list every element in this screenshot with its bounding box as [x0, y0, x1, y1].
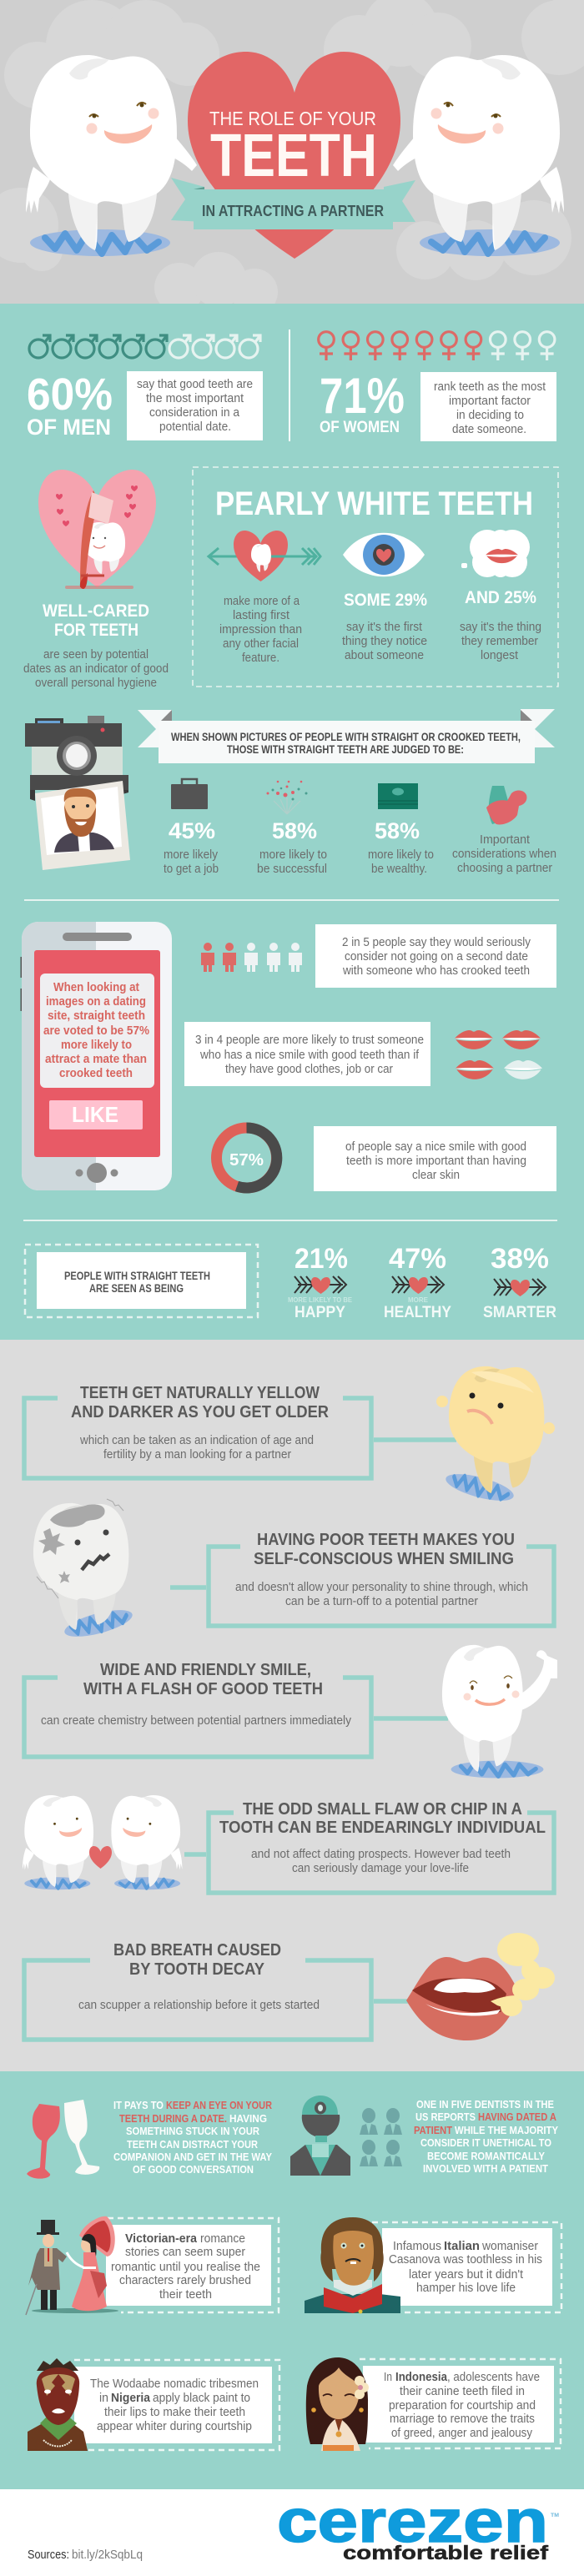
text [251, 1848, 511, 1875]
text: later years but it didn't [409, 2268, 523, 2282]
sources [28, 2548, 143, 2562]
text: OF GOOD CONVERSATION [133, 2163, 254, 2176]
text: of greed, anger and jealousy [391, 2427, 533, 2440]
icon: banknotes [378, 783, 418, 809]
text: can create chemistry between potential partners immediately [41, 1714, 352, 1728]
stat: 57% clear skin: of people say a nice smile with good [345, 1140, 526, 1154]
title: IN ATTRACTING A PARTNER [202, 203, 384, 219]
stat: 45% get a job: more likely [164, 848, 219, 862]
heading: HAVING POOR TEETH MAKES YOU [257, 1531, 515, 1549]
banner: straight teeth judged: WHEN SHOWN PICTURES OF PEOPLE WITH STRAIGHT OR CROOKED TEETH, [171, 731, 521, 743]
stat: 3 in 4 people: they have good clothes, job or car [225, 1063, 393, 1076]
text [414, 2098, 558, 2175]
text box: women: rank teeth as the most [434, 380, 546, 394]
stat: 58% wealthy [368, 783, 434, 876]
text box: women [420, 372, 556, 441]
text: fertility by a man looking for a partner [103, 1448, 291, 1462]
text: in [99, 2392, 108, 2405]
heading [71, 1384, 330, 1421]
heading: pearly white teeth: PEARLY WHITE TEETH [215, 486, 533, 522]
background: header [0, 0, 584, 304]
sources: Sources: [28, 2548, 69, 2562]
phone screen card text: site, straight teeth [48, 1009, 145, 1023]
text: IT PAYS TO [113, 2099, 164, 2111]
stat: 47% healthy [384, 1243, 451, 1321]
icon row: people [201, 943, 302, 972]
stat: considerations: Important [480, 833, 530, 847]
icon: briefcase [171, 779, 208, 809]
text box: women: date someone. [452, 423, 526, 436]
text: womaniser [481, 2240, 538, 2253]
heading: SELF-CONSCIOUS WHEN SMILING [254, 1550, 514, 1568]
text: SOMETHING STUCK IN YOUR [126, 2125, 260, 2137]
banner: straight teeth judged [138, 709, 555, 763]
text: and doesn't allow your personality to shine through, which [235, 1581, 528, 1594]
card: Indonesia [306, 2357, 561, 2451]
stat: and 25%: longest [481, 649, 518, 662]
icon: eye [343, 533, 425, 576]
text [384, 2371, 540, 2440]
text: BECOME ROMANTICALLY [427, 2150, 545, 2162]
panel: men statistic [27, 335, 263, 440]
card: Wodaabe [28, 2358, 279, 2451]
text: COMPANION AND GET IN THE WAY [113, 2151, 272, 2163]
heading: AND DARKER AS YOU GET OLDER [71, 1403, 330, 1421]
panel: yellow teeth [24, 1366, 555, 1506]
illustration: yellow sad tooth [436, 1366, 555, 1506]
text: their canine teeth filed in [400, 2385, 525, 2398]
card: Casanova [305, 2217, 561, 2314]
icon: heart arrow [392, 1276, 444, 1294]
phone screen card text: crooked teeth [59, 1067, 133, 1080]
text: apply black paint to [153, 2392, 250, 2405]
text [389, 2240, 542, 2295]
stat: 38% smarter: 38% [491, 1243, 549, 1275]
text: Nigeria [111, 2392, 151, 2405]
text: stories can seem super [125, 2246, 245, 2259]
text [235, 1581, 528, 1608]
panel: bad breath [24, 1933, 555, 2040]
text: can be a turn-off to a potential partner [285, 1595, 478, 1608]
stat: considerations [452, 786, 556, 875]
phone screen card text: When looking at [53, 981, 139, 994]
text: characters rarely brushed [119, 2274, 251, 2287]
text: first impression: make more of a [224, 595, 300, 608]
stat: 47% healthy: 47% [389, 1243, 446, 1275]
text [111, 2232, 260, 2302]
stat: 47% healthy: MORE [408, 1296, 428, 1304]
text: Italian [444, 2240, 480, 2253]
text: their lips to make their teeth [104, 2406, 245, 2419]
stat: some 29%: say it's the first [346, 621, 422, 634]
stat: 21% happy: MORE LIKELY TO BE [288, 1296, 352, 1304]
icon row: female symbols [319, 332, 555, 360]
text: HAVING DATED A [478, 2111, 557, 2123]
text box: men: the most important [146, 392, 244, 405]
donut chart: 57% [217, 1128, 277, 1188]
text box: men: potential date. [159, 420, 231, 434]
icon group: four lips [455, 1030, 542, 1079]
heading [254, 1531, 515, 1568]
heading: TEETH GET NATURALLY YELLOW [80, 1384, 320, 1402]
text: CONSIDER IT UNETHICAL TO [420, 2136, 551, 2149]
text: hygiene: dates as an indicator of good [23, 662, 169, 676]
stat: 45% get a job: to get a job [164, 863, 219, 876]
donut chart: 57%: 57% [229, 1151, 264, 1170]
title heart [188, 52, 400, 259]
stat: 38% smarter [483, 1243, 556, 1321]
stat: 58% successful: 58% [272, 818, 317, 843]
stat: and 25% [460, 588, 541, 662]
title: TEETH [210, 123, 377, 189]
text: appear whiter during courtship [97, 2420, 252, 2433]
text box: men [127, 371, 263, 440]
text: Victorian-era [125, 2232, 198, 2246]
card: Victorian-era [26, 2216, 279, 2315]
text box: women: in deciding to [456, 409, 524, 422]
text: romantic until you realise the [111, 2261, 260, 2274]
stat: considerations: choosing a partner [457, 862, 552, 875]
phone screen card text: images on a dating [46, 995, 146, 1009]
text: romance [200, 2232, 245, 2246]
text: TEETH DURING A DATE. [119, 2112, 227, 2125]
heading [219, 1800, 546, 1837]
heading: well-cared for teeth [43, 601, 149, 640]
illustration: phone dating app [20, 922, 172, 1190]
stat: 58% successful: be successful [257, 863, 327, 876]
text: marriage to remove the traits [390, 2412, 535, 2426]
logo: cerezen: TM [551, 2513, 559, 2518]
text: first impression: impression than [219, 623, 302, 636]
stat: 58% wealthy: 58% [375, 818, 420, 843]
icon: heart arrow [295, 1276, 346, 1294]
text: PATIENT [414, 2124, 452, 2136]
icon group: patients [360, 2108, 402, 2166]
text [79, 1434, 314, 1462]
text: INVOLVED WITH A PATIENT [423, 2162, 548, 2175]
text: WHILE THE MAJORITY [455, 2124, 558, 2136]
heading [83, 1661, 323, 1698]
stat: 3 in 4 people: 3 in 4 people are more likely to trust someone [195, 1034, 424, 1047]
text: first impression: lasting first [233, 609, 289, 622]
panel background: grey facts [0, 1340, 584, 2071]
stat: 3 in 4 people: who has a nice smile with good teeth than if [199, 1049, 420, 1062]
stat: 3 in 4 people [184, 1022, 542, 1086]
stat: 57% clear skin [217, 1126, 556, 1191]
text: first impression: feature. [242, 652, 279, 665]
panel: odd small flaw [23, 1795, 554, 1893]
callout: people with straight teeth: ARE SEEN AS BEING [89, 1282, 184, 1295]
text: US REPORTS [415, 2111, 476, 2123]
background clouds [0, 0, 584, 315]
text [90, 2377, 259, 2433]
title ribbon [171, 178, 415, 229]
stat: 45% get a job [164, 779, 219, 876]
panel: pearly white teeth [193, 467, 558, 687]
heading: TOOTH CAN BE ENDEARINGLY INDIVIDUAL [219, 1819, 546, 1837]
stat: 58% wealthy: be wealthy. [371, 863, 427, 876]
heading: BAD BREATH CAUSED [113, 1941, 281, 1960]
logo: cerezen: comfortable relief [343, 2542, 548, 2563]
number: 60% of men [27, 370, 113, 440]
fact: dentists dating patients [290, 2096, 558, 2176]
stat: 38% smarter: SMARTER [483, 1304, 556, 1321]
heading [113, 1941, 281, 1979]
number: 60% of men: 60% [27, 370, 113, 420]
panel background: teal statistics [0, 304, 584, 1340]
stat: some 29% [342, 591, 427, 662]
panel: women statistic [319, 332, 556, 441]
tooth character: left [26, 55, 197, 256]
stat: 2 in 5 people [201, 924, 556, 988]
text: and not affect dating prospects. However bad teeth [251, 1848, 511, 1861]
stat: and 25%: say it's the thing [460, 621, 541, 634]
illustration: Casanova portrait [305, 2217, 400, 2314]
panel: well-cared for teeth [23, 470, 169, 690]
stat: 57% clear skin: clear skin [412, 1169, 460, 1182]
stat: 21% happy: 21% [295, 1243, 348, 1275]
like button [49, 1100, 143, 1130]
text: their teeth [159, 2288, 212, 2302]
stat: 45% get a job: 45% [169, 818, 215, 843]
stat: 2 in 5 people: consider not going on a second date [345, 950, 528, 963]
heading: well-cared for teeth: WELL-CARED [43, 601, 149, 621]
icon: heart arrow [494, 1279, 546, 1296]
number: 71% of women: 71% [320, 368, 405, 424]
title: THE ROLE OF YOUR [209, 108, 376, 129]
text: ONE IN FIVE DENTISTS IN THE [416, 2098, 554, 2111]
text: hygiene [23, 648, 169, 690]
icon: dentist [290, 2096, 350, 2176]
text: KEEP AN EYE ON YOUR [166, 2099, 273, 2111]
stat: some 29%: SOME 29% [344, 591, 427, 610]
stat: some 29%: about someone [345, 649, 424, 662]
text: can scupper a relationship before it gets started [78, 1999, 320, 2012]
footer background [0, 2489, 584, 2576]
number: 60% of men: OF MEN [27, 415, 111, 440]
title [202, 108, 384, 219]
text: Casanova was toothless in his [389, 2253, 542, 2267]
stat: considerations: considerations when [452, 848, 556, 861]
phone screen card text: are voted to be 57% [43, 1024, 149, 1038]
text: hygiene: overall personal hygiene [35, 677, 157, 690]
text: can seriously damage your love-life [292, 1862, 469, 1875]
text box: men: consideration in a [149, 406, 240, 420]
text: TEETH CAN DISTRACT YOUR [127, 2138, 259, 2151]
stat: 2 in 5 people: 2 in 5 people say they would seriously [342, 936, 531, 949]
number: 71% of women: OF WOMEN [320, 419, 400, 436]
icon: thought bubble with lips [461, 530, 530, 577]
heading: BY TOOTH DECAY [129, 1960, 265, 1979]
illustration: waving white tooth [442, 1645, 557, 1778]
icon: heart with arrow and tooth [209, 531, 320, 581]
panel: poor teeth [33, 1499, 554, 1642]
heading: THE ODD SMALL FLAW OR CHIP IN A [243, 1800, 522, 1819]
text: Indonesia [395, 2371, 448, 2384]
stat: and 25%: they remember [461, 635, 538, 648]
icon row: male symbols [29, 335, 260, 358]
phone screen card text: attract a mate than [45, 1053, 147, 1066]
stat: 21% happy: HAPPY [295, 1304, 345, 1321]
illustration: instant camera with photo of bearded man [25, 716, 130, 870]
icon: kissing couple [486, 786, 526, 824]
text: first impression [219, 595, 302, 665]
text box: women: important factor [449, 395, 531, 408]
stat: 58% wealthy: more likely to [368, 848, 434, 862]
tooth character: right [393, 55, 564, 256]
text: which can be taken as an indication of age and [79, 1434, 314, 1447]
stat: 58% successful: more likely to [259, 848, 327, 862]
illustration: Victorian couple [26, 2216, 118, 2315]
text: In [384, 2371, 392, 2384]
text box: men: say that good teeth are [137, 378, 253, 391]
stat: 58% successful [257, 781, 327, 876]
illustration: mouth with bad breath [406, 1933, 555, 2040]
stat: 47% healthy: HEALTHY [384, 1304, 451, 1321]
icon: fireworks [267, 781, 307, 814]
stat: and 25%: AND 25% [465, 588, 536, 607]
illustration: damaged tooth [33, 1499, 135, 1642]
stat: 21% happy [288, 1243, 352, 1321]
icon: wine glasses [27, 2100, 99, 2179]
phone screen card text: more likely to [61, 1039, 132, 1052]
phone screen card text [40, 974, 154, 1088]
panel background: teal trivia [0, 2071, 584, 2489]
text: hamper his love life [416, 2282, 516, 2295]
callout: people with straight teeth [25, 1245, 258, 1317]
stat: 57% clear skin: teeth is more important than having [346, 1155, 526, 1168]
text: HAVING [229, 2112, 267, 2125]
panel: wide and friendly smile [24, 1645, 557, 1778]
illustration: two teeth with heart [23, 1795, 182, 1889]
text: Infamous [393, 2240, 441, 2253]
stat: some 29%: thing they notice [342, 635, 427, 648]
heading: WIDE AND FRIENDLY SMILE, [100, 1661, 311, 1679]
banner: straight teeth judged: THOSE WITH STRAIGHT TEETH ARE JUDGED TO BE: [227, 743, 464, 756]
text: hygiene: are seen by potential [43, 648, 149, 662]
sources: bit.ly/2kSqbLq [72, 2548, 143, 2562]
stat: 2 in 5 people: with someone who has crooked teeth [342, 964, 530, 978]
illustration: Wodaabe tribesman [28, 2358, 88, 2451]
heading: well-cared for teeth: FOR TEETH [54, 621, 138, 640]
text [113, 2099, 273, 2176]
text: , adolescents have [447, 2371, 540, 2384]
heading: WITH A FLASH OF GOOD TEETH [83, 1680, 323, 1698]
fact: keep an eye on your teeth [27, 2099, 273, 2179]
callout: people with straight teeth: PEOPLE WITH STRAIGHT TEETH [64, 1270, 210, 1282]
text: first impression: any other facial [223, 637, 299, 651]
like button: LIKE [72, 1102, 118, 1127]
illustration: tooth with toothbrush on a heart [38, 470, 156, 589]
text: The Wodaabe nomadic tribesmen [90, 2377, 259, 2391]
text: preparation for courtship and [389, 2399, 536, 2412]
illustration: Indonesian woman [306, 2357, 369, 2451]
logo: cerezen: cerezen [277, 2488, 548, 2555]
